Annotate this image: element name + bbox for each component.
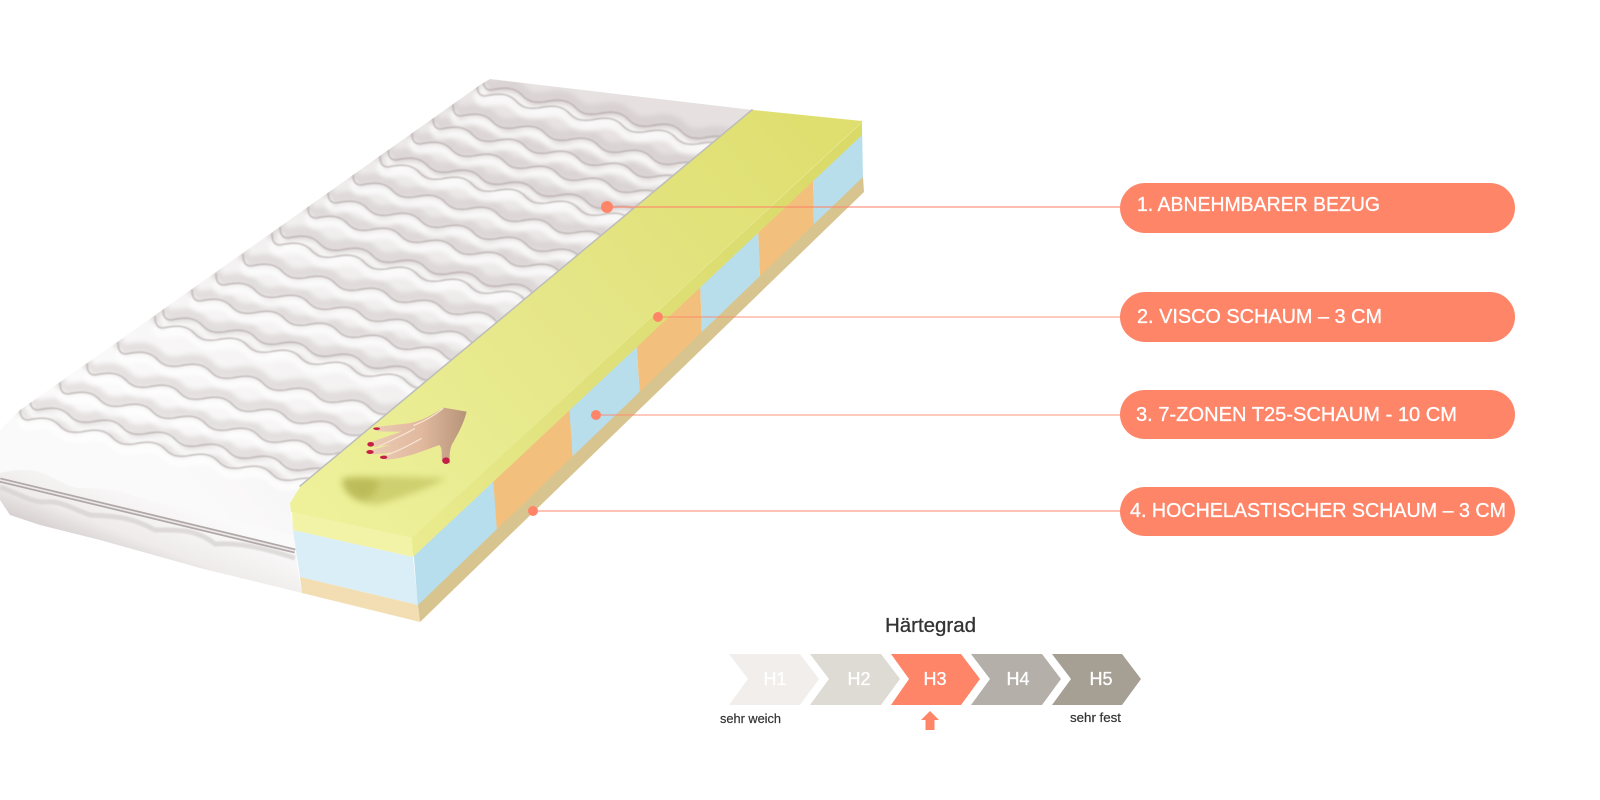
chevron H4: H4 [1006, 669, 1030, 689]
callout 1: removable cover [601, 183, 1515, 233]
removable quilted cover [0, 79, 753, 593]
chevron H2 [810, 654, 900, 705]
label: sehr fest: sehr fest [1070, 710, 1121, 725]
callout 4: high-elastic foam: 4. HOCHELASTISCHER SCHAUM – 3 CM [1130, 500, 1506, 522]
heading: Härtegrad: Härtegrad [885, 615, 976, 637]
callout 3: 7-zone foam: 3. 7-ZONEN T25-SCHAUM - 10 CM [1136, 404, 1457, 426]
chevron H3 selected: H3 [923, 669, 947, 689]
icon: hand pressing foam [366, 408, 467, 464]
mattress illustration [0, 73, 864, 622]
hand imprint in foam [342, 476, 446, 504]
chevron H2: H2 [847, 669, 871, 689]
zipper [0, 480, 295, 551]
label: sehr weich: sehr weich [720, 711, 781, 726]
layer: high-elastic foam [300, 177, 864, 622]
chevron H1 [729, 654, 819, 705]
chevron H1: H1 [763, 669, 787, 689]
callout 4: high-elastic foam [528, 487, 1515, 536]
layer: 7-zone foam [293, 123, 863, 608]
chevron H5 [1052, 654, 1141, 705]
callout 1: removable cover: 1. ABNEHMBARER BEZUG [1137, 194, 1380, 216]
callout 3: 7-zone foam [591, 390, 1515, 439]
cover side panel [0, 470, 302, 593]
callout 2: visco foam: 2. VISCO SCHAUM – 3 CM [1137, 306, 1382, 328]
callout 2: visco foam [653, 292, 1515, 342]
chevron H4 [971, 654, 1061, 705]
arrow: selected firmness marker [921, 711, 939, 730]
firmness scale [720, 615, 1141, 730]
layer: visco foam [290, 110, 862, 557]
mattress infographic canvas [0, 79, 1515, 730]
chevron H5: H5 [1089, 669, 1113, 689]
chevron H3 selected [891, 654, 980, 705]
